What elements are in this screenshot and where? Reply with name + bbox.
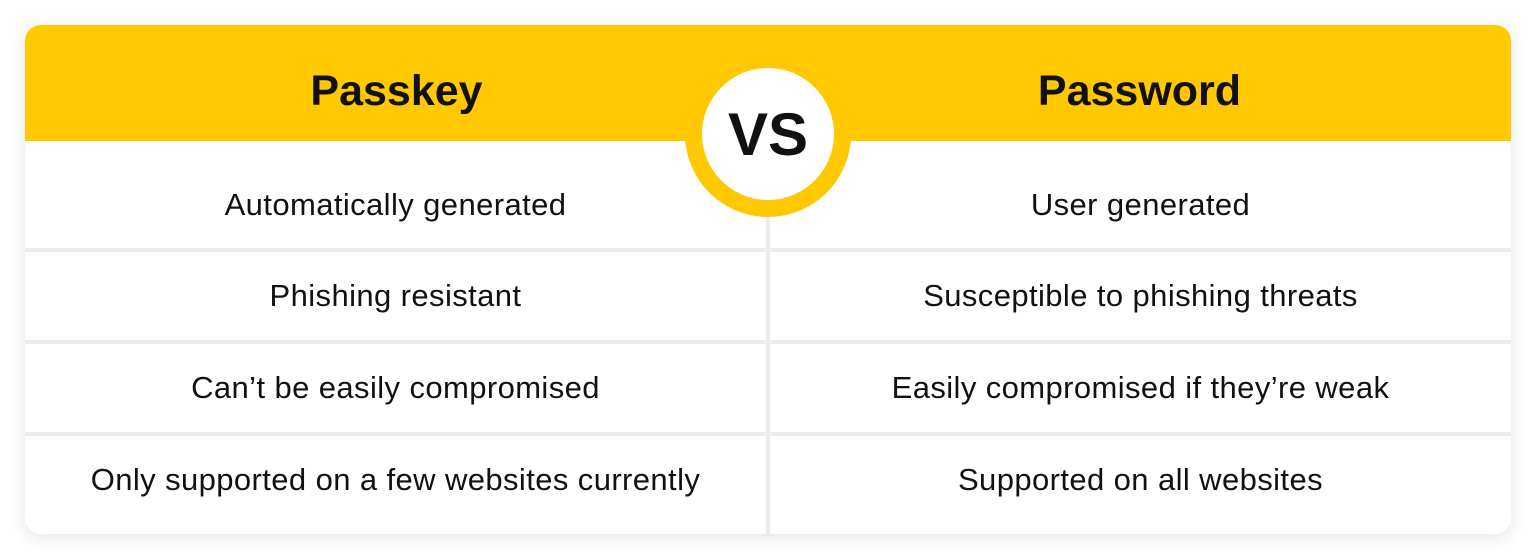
heading: Password: Password (1038, 67, 1241, 115)
row 1 right: User generated (1031, 187, 1250, 222)
VS badge: VS (728, 101, 808, 168)
heading: Passkey: Passkey (310, 67, 483, 115)
row 2 right: Susceptible to phishing threats (923, 278, 1358, 313)
row 3 left: Can’t be easily compromised (191, 370, 600, 405)
row 3 right: Easily compromised if they’re weak (892, 370, 1389, 405)
row 4 right: Supported on all websites (958, 462, 1323, 497)
row 1 left: Automatically generated (225, 187, 566, 222)
VS badge (685, 51, 851, 217)
row 2 left: Phishing resistant (270, 278, 521, 313)
header bar (25, 25, 1511, 141)
row 4 left: Only supported on a few websites currently (91, 462, 700, 497)
